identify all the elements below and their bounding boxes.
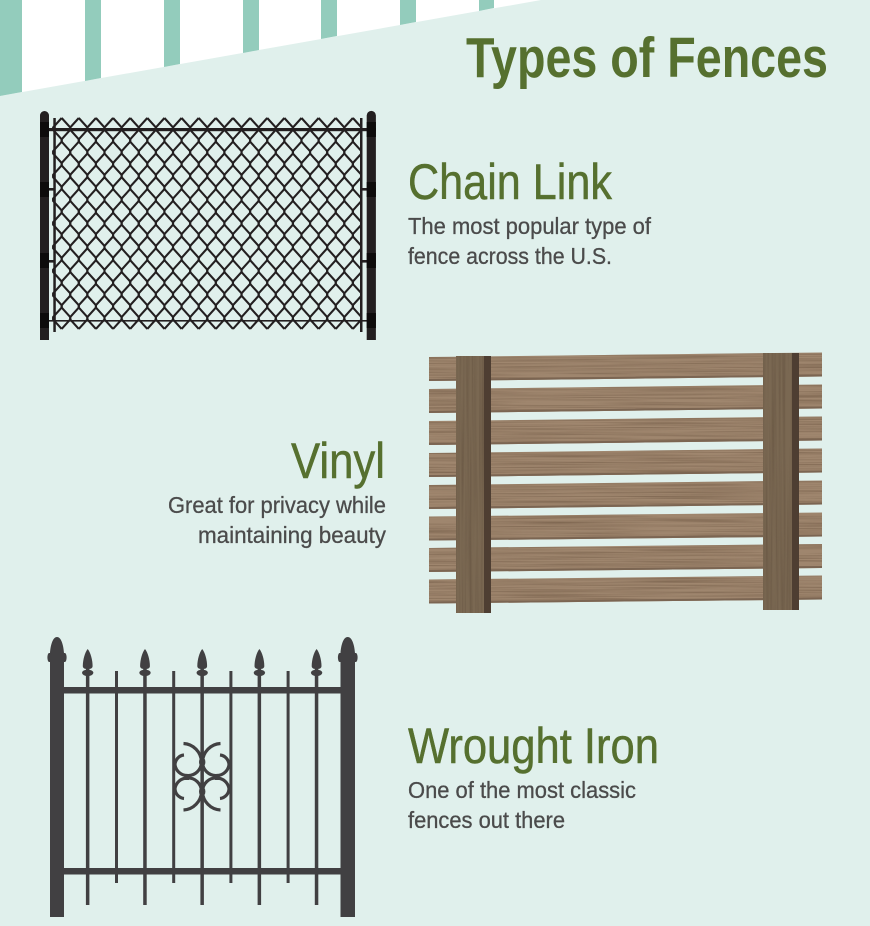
chain link description: fence across the U.S. bbox=[408, 243, 612, 269]
vinyl heading: Vinyl bbox=[291, 433, 385, 489]
chain link inner bars and rails bbox=[40, 118, 376, 332]
wrought iron heading: Wrought Iron bbox=[408, 718, 659, 774]
chain link description bbox=[408, 213, 651, 269]
vinyl horizontal planks bbox=[429, 352, 822, 604]
vinyl right post bbox=[763, 353, 799, 610]
wrought iron fence illustration bbox=[47, 637, 358, 917]
chain link description: The most popular type of bbox=[408, 213, 651, 239]
vinyl description: maintaining beauty bbox=[198, 522, 386, 548]
iron right post bbox=[338, 637, 358, 917]
wrought iron description: fences out there bbox=[408, 807, 565, 833]
iron left post bbox=[47, 637, 67, 917]
vinyl description bbox=[168, 492, 386, 548]
iron spear pickets bbox=[82, 649, 322, 905]
wrought iron description: One of the most classic bbox=[408, 777, 636, 803]
vinyl fence illustration bbox=[429, 352, 822, 613]
iron rails bbox=[64, 687, 341, 874]
iron scroll ornament bbox=[175, 744, 229, 810]
vinyl plank lower edges bbox=[429, 376, 822, 602]
chain link right post bbox=[367, 111, 376, 340]
chain link heading: Chain Link bbox=[408, 154, 613, 210]
wrought iron description bbox=[408, 777, 636, 833]
vinyl left post bbox=[456, 356, 491, 613]
chain link mesh bbox=[53, 118, 361, 329]
chain link left post bbox=[40, 111, 49, 340]
header fence stripes bbox=[0, 0, 541, 96]
chain link fence illustration bbox=[40, 111, 376, 340]
vinyl description: Great for privacy while bbox=[168, 492, 386, 518]
iron plain pickets bbox=[115, 671, 290, 883]
